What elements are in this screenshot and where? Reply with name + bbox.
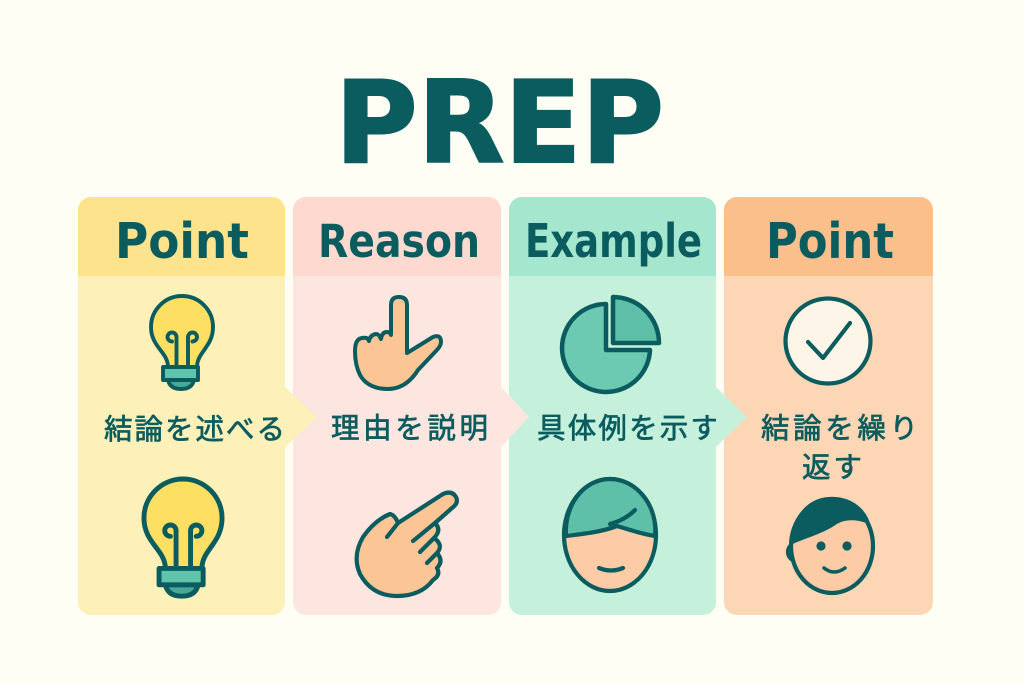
text: state the conclusion: 結論を述べる bbox=[104, 414, 285, 446]
icon: small light bulb bbox=[151, 296, 213, 389]
panel: Reason bbox=[293, 197, 501, 615]
panel body bbox=[293, 197, 501, 615]
panel body bbox=[724, 197, 933, 615]
panel: Example bbox=[501, 197, 719, 615]
icon: hand pointing up bbox=[355, 297, 441, 389]
panel body bbox=[78, 197, 285, 615]
panel: Point (conclusion) bbox=[78, 197, 285, 615]
text: repeat the conclusion: 返す bbox=[802, 452, 862, 484]
heading: Point: Point bbox=[115, 213, 249, 270]
heading: Point: Point bbox=[766, 213, 894, 270]
panel header band bbox=[509, 197, 716, 276]
icon: face with teal cap bbox=[564, 479, 656, 591]
icon: pie chart bbox=[562, 297, 659, 392]
arrow: Reason to Example bbox=[501, 387, 529, 447]
arrow: Example to Point bbox=[716, 387, 747, 447]
icon: hand pointing diagonally bbox=[357, 493, 457, 596]
panel header band bbox=[724, 197, 933, 276]
icon: smiling face bbox=[788, 499, 873, 593]
heading: Example: Example bbox=[525, 214, 702, 268]
panel header band bbox=[293, 197, 501, 276]
text: give a concrete example: 具体例を示す bbox=[537, 413, 719, 445]
text: repeat the conclusion bbox=[761, 413, 918, 484]
icon: large light bulb bbox=[144, 479, 222, 596]
heading: Reason: Reason bbox=[318, 215, 480, 268]
icon: check mark circle bbox=[786, 298, 870, 384]
title: PREP bbox=[335, 57, 664, 189]
panel body bbox=[509, 197, 716, 615]
text: explain the reason: 理由を説明 bbox=[331, 413, 488, 445]
text: repeat the conclusion: 結論を繰り bbox=[761, 413, 918, 445]
panel: Point (repeat) bbox=[724, 197, 933, 615]
arrow: Point to Reason bbox=[285, 387, 317, 447]
panel header band bbox=[78, 197, 285, 276]
